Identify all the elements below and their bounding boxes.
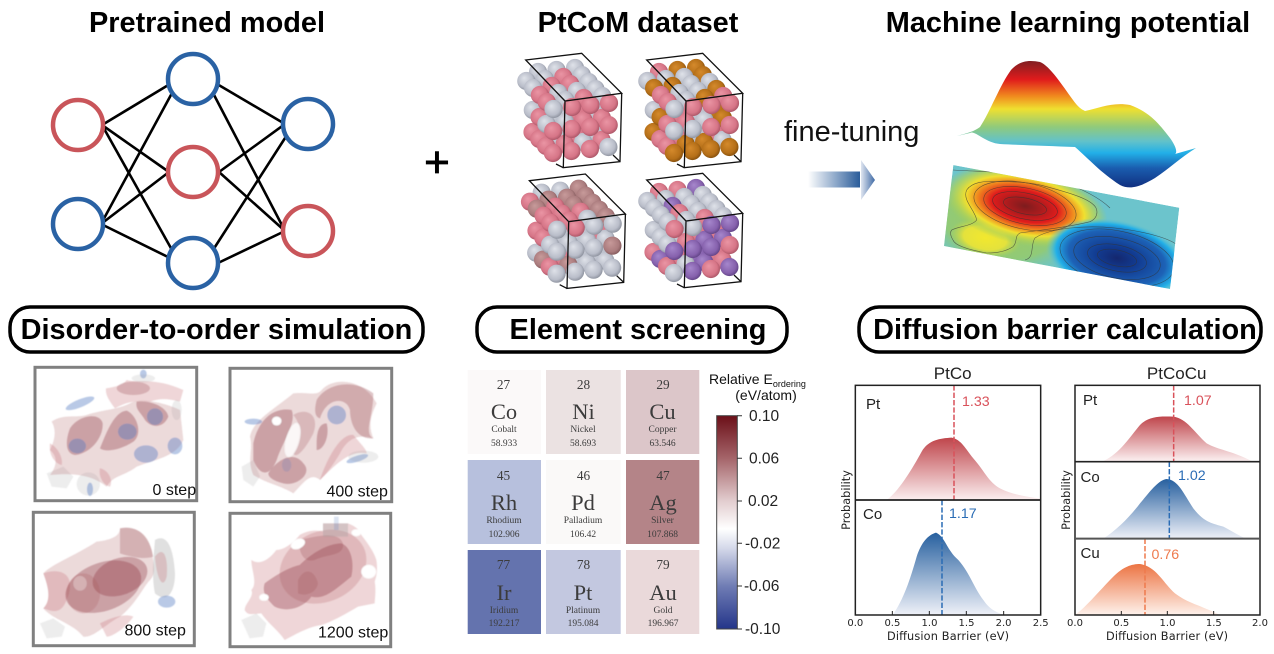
element: Au: [626, 550, 699, 634]
element: Cu: 63.546: [649, 439, 676, 449]
element: Ni: Ni: [572, 399, 595, 424]
element: Co: 27: [497, 377, 510, 392]
chart title: PtCoCu: PtCoCu: [1147, 364, 1206, 383]
labels PtCoCu: Pt: [1083, 392, 1098, 409]
chart: PtCoCu diffusion barrier: [1060, 364, 1268, 643]
chart: PtCo diffusion barrier: [840, 364, 1049, 643]
colorbar: 0.06: [749, 450, 779, 468]
element: Pt: 195.084: [568, 619, 599, 629]
colorbar: -0.06: [744, 578, 779, 595]
element: Ag: 107.868: [647, 530, 678, 540]
element: Au: 79: [656, 557, 670, 572]
element: Pt: Pt: [574, 580, 593, 605]
element: Co: [468, 370, 541, 454]
labels PtCo: Pt: [866, 396, 881, 413]
element: Ag: Ag: [649, 490, 677, 515]
colorbar: [717, 408, 781, 638]
atom structure: Pt-Co: [517, 53, 622, 168]
element: Ni: 28: [577, 377, 590, 392]
labels PtCoCu: 0.76: [1152, 547, 1179, 563]
element: Rh: Rhodium: [486, 516, 522, 526]
panel: simulation 800 step: [33, 512, 194, 646]
atom structure: Pt-Co-Cu: [638, 53, 743, 168]
label: 1200 step: 1200 step: [318, 624, 388, 642]
network nodes: [53, 54, 333, 288]
colorbar title: [709, 371, 806, 403]
element: Pd: Palladium: [564, 516, 603, 526]
label: 800 step: 800 step: [124, 622, 186, 640]
colorbar title: (eV/atom): [735, 387, 797, 403]
labels PtCo: 2.0: [996, 618, 1012, 629]
element: Au: 196.967: [648, 619, 679, 629]
labels PtCoCu: [1060, 392, 1268, 643]
labels PtCoCu: Probability: [1060, 470, 1073, 530]
atom structure: Pt-Co-M purple: [638, 173, 743, 288]
labels PtCoCu: 1.07: [1184, 393, 1212, 409]
labels PtCoCu: 0.0: [1067, 618, 1083, 629]
element: Cu: 29: [656, 377, 670, 392]
labels PtCoCu: 1.0: [1160, 618, 1175, 629]
element: Pt: [546, 550, 621, 634]
panel: simulation 400 step: [230, 368, 392, 502]
element: Au: Gold: [654, 606, 673, 616]
labels PtCo: 1.33: [962, 394, 990, 410]
element: Ni: 58.693: [570, 439, 596, 449]
element: Pd: Pd: [571, 490, 595, 515]
labels PtCo: Diffusion Barrier (eV): [887, 630, 1009, 643]
heading: Diffusion barrier calculation: Diffusion barrier calculation: [873, 314, 1257, 346]
heading: Element screening: [477, 307, 787, 352]
labels PtCo: 1.17: [949, 506, 977, 522]
3D potential energy surface: [957, 61, 1196, 187]
colorbar: 0.02: [748, 493, 778, 510]
neural network diagram: [53, 54, 333, 288]
labels PtCo: 1.5: [959, 618, 974, 629]
title: Machine learning potential: Machine learning potential: [886, 7, 1250, 39]
plus sign: +: [424, 138, 450, 187]
colorbar: 0.10: [749, 408, 780, 425]
element: Ir: Iridium: [490, 606, 519, 616]
element: Cu: Copper: [649, 425, 677, 435]
panel: simulation 1200 step: [230, 513, 391, 647]
colorbar: -0.10: [745, 621, 781, 638]
element: Ag: 47: [656, 468, 670, 483]
labels PtCo: 2.5: [1033, 618, 1049, 629]
labels PtCo: 0.0: [847, 618, 863, 629]
labels PtCo: 1.0: [922, 618, 937, 629]
label: 400 step: 400 step: [326, 484, 388, 500]
element: Ag: Silver: [651, 516, 675, 526]
element: Pd: 106.42: [570, 530, 596, 540]
element: Rh: Rh: [491, 490, 517, 515]
element: Ag: [626, 460, 699, 544]
label: 0 step: 0 step: [152, 482, 196, 499]
labels PtCo: Co: [863, 506, 882, 523]
labels PtCoCu: Co: [1080, 469, 1100, 486]
panel: simulation 0 step: [35, 367, 197, 501]
labels PtCoCu: 0.5: [1113, 618, 1129, 629]
element: Ni: Nickel: [570, 425, 596, 435]
element: Rh: 45: [497, 468, 510, 483]
element: Ni: [546, 370, 621, 454]
labels PtCo: [840, 394, 1049, 643]
contour lines: [951, 170, 1180, 296]
atom structure: Pt-Co-Ag: [521, 174, 625, 288]
labels PtCoCu: Diffusion Barrier (eV): [1106, 630, 1228, 643]
colorbar title: ordering: [773, 379, 806, 389]
fine-tuning label: fine-tuning: [784, 116, 919, 148]
labels PtCo: Probability: [840, 470, 853, 530]
colorbar: -0.02: [745, 536, 780, 552]
element: Rh: [468, 460, 541, 544]
arrow: fine-tuning: [808, 160, 875, 200]
element: Ir: Ir: [496, 580, 512, 605]
network connections: [101, 84, 287, 263]
periodic table: [468, 370, 699, 634]
element: Ir: 77: [497, 557, 510, 572]
heading: Disorder-to-order simulation: Disorder-to-order simulation: [21, 314, 412, 346]
element: Pt: Platinum: [566, 606, 601, 616]
element: Pd: 46: [577, 468, 590, 483]
element: Pt: 78: [577, 557, 590, 572]
labels PtCoCu: 2.0: [1252, 618, 1268, 629]
distributions PtCo: [855, 385, 1041, 615]
distributions PtCoCu: [1075, 385, 1260, 615]
element: Cu: Cu: [649, 399, 676, 424]
element: Co: 58.933: [491, 439, 517, 449]
labels PtCo: 0.5: [884, 618, 900, 629]
heading: Disorder-to-order simulation: [10, 307, 423, 352]
element: Cu: [626, 370, 699, 454]
labels PtCoCu: 1.02: [1178, 468, 1206, 484]
title: PtCoM dataset: PtCoM dataset: [538, 7, 739, 39]
element: Ir: 192.217: [489, 619, 520, 629]
element: Rh: 102.906: [489, 530, 520, 540]
element: Au: Au: [649, 580, 677, 605]
heading: Diffusion barrier calculation: [859, 307, 1261, 352]
labels PtCoCu: Cu: [1080, 545, 1100, 562]
title: Pretrained model: Pretrained model: [89, 7, 325, 39]
element: Co: Co: [491, 399, 517, 424]
labels PtCoCu: 1.5: [1206, 618, 1222, 629]
heading: Element screening: Element screening: [510, 314, 766, 346]
element: Pd: [546, 460, 621, 544]
element: Ir: [468, 550, 541, 634]
contour map: [944, 165, 1180, 289]
colorbar title: Relative E: [709, 371, 773, 387]
element: Co: Cobalt: [491, 425, 517, 435]
chart title: PtCo: PtCo: [934, 364, 972, 383]
